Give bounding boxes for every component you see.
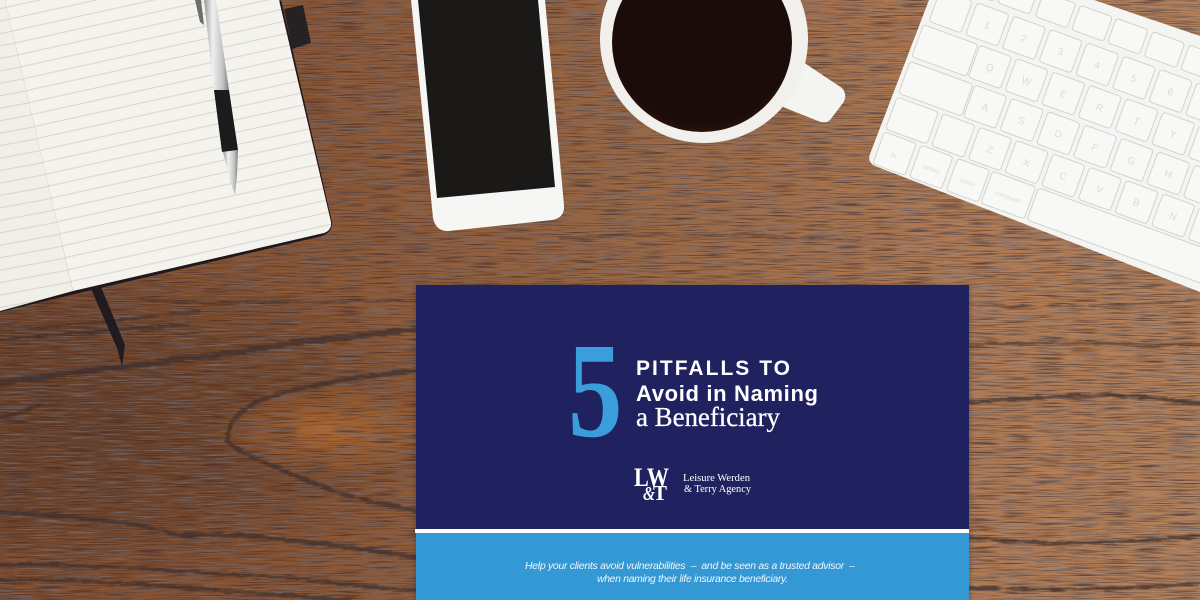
key legends: H <box>1163 168 1173 181</box>
key legends: 5 <box>1129 73 1138 86</box>
logo monogram <box>634 463 669 505</box>
large numeral 5: 5 <box>568 315 622 466</box>
key legends: R <box>1094 102 1105 115</box>
white divider <box>415 529 969 533</box>
key legends: D <box>1053 128 1063 141</box>
key legends: 3 <box>1056 47 1065 59</box>
key legends: T <box>1131 116 1141 128</box>
letter row two <box>898 61 1200 209</box>
keyboard <box>869 0 1200 292</box>
footer tagline: when naming their life insurance beneficiary. <box>597 574 788 585</box>
key legends: B <box>1131 197 1141 210</box>
key legends: fn <box>890 153 897 160</box>
key legends: C <box>1057 171 1068 183</box>
coffee cup <box>600 0 845 143</box>
agency logo <box>634 463 752 505</box>
key legends <box>892 22 1177 220</box>
key legends: 6 <box>1166 87 1175 99</box>
notebook left page <box>0 0 73 311</box>
brochure blue footer panel <box>416 533 969 600</box>
pen <box>195 0 238 195</box>
logo monogram: & <box>643 483 655 505</box>
footer tagline <box>525 561 855 585</box>
key legends: E <box>1058 89 1068 102</box>
key legends: 2 <box>1019 33 1028 46</box>
smartphone <box>411 0 564 231</box>
title line two: Avoid in Naming <box>636 381 818 406</box>
number row <box>929 0 1200 120</box>
footer tagline: Help your clients avoid vulnerabilities – and be seen as a trusted advisor – <box>525 561 855 572</box>
title line three: a Beneficiary <box>636 402 780 432</box>
key legends: control <box>921 164 940 176</box>
logo monogram: LW <box>634 463 669 492</box>
key legends: S <box>1016 115 1027 128</box>
key legends: W <box>1020 75 1033 89</box>
key legends: X <box>1021 157 1031 170</box>
key legends: V <box>1094 184 1105 197</box>
logo monogram: T <box>653 481 667 505</box>
key legends: 1 <box>982 20 992 32</box>
agency name: Leisure Werden <box>683 473 751 484</box>
notebook right page <box>5 0 331 291</box>
key legends: Y <box>1168 129 1178 142</box>
notebook <box>0 0 332 366</box>
key legends: A <box>980 102 990 115</box>
cup body <box>600 0 808 143</box>
coffee <box>612 0 792 132</box>
keys <box>873 0 1200 288</box>
brochure navy cover panel <box>416 285 969 529</box>
cup handle <box>783 62 845 122</box>
title <box>636 357 818 432</box>
key legends: 4 <box>1092 60 1102 72</box>
brochure shadow <box>414 284 971 600</box>
bookmark ribbon <box>91 287 125 366</box>
notebook cover edge <box>0 0 332 312</box>
phone screen <box>418 0 555 198</box>
key legends: G <box>1126 155 1137 168</box>
function row <box>989 0 1200 77</box>
brochure <box>414 284 971 600</box>
key legends: N <box>1167 211 1178 223</box>
key legends: command <box>994 190 1021 205</box>
letter row three <box>885 97 1200 251</box>
bottom row and space bar <box>873 132 1200 288</box>
elastic band <box>284 5 311 49</box>
title line one: PITFALLS TO <box>636 357 790 380</box>
key legends: F <box>1090 142 1099 154</box>
key legends: Z <box>985 144 994 157</box>
agency name <box>683 473 752 495</box>
letter row one <box>912 25 1200 169</box>
key legends: option <box>958 177 976 189</box>
agency name: & Terry Agency <box>684 484 752 495</box>
key legends: Q <box>984 62 995 75</box>
